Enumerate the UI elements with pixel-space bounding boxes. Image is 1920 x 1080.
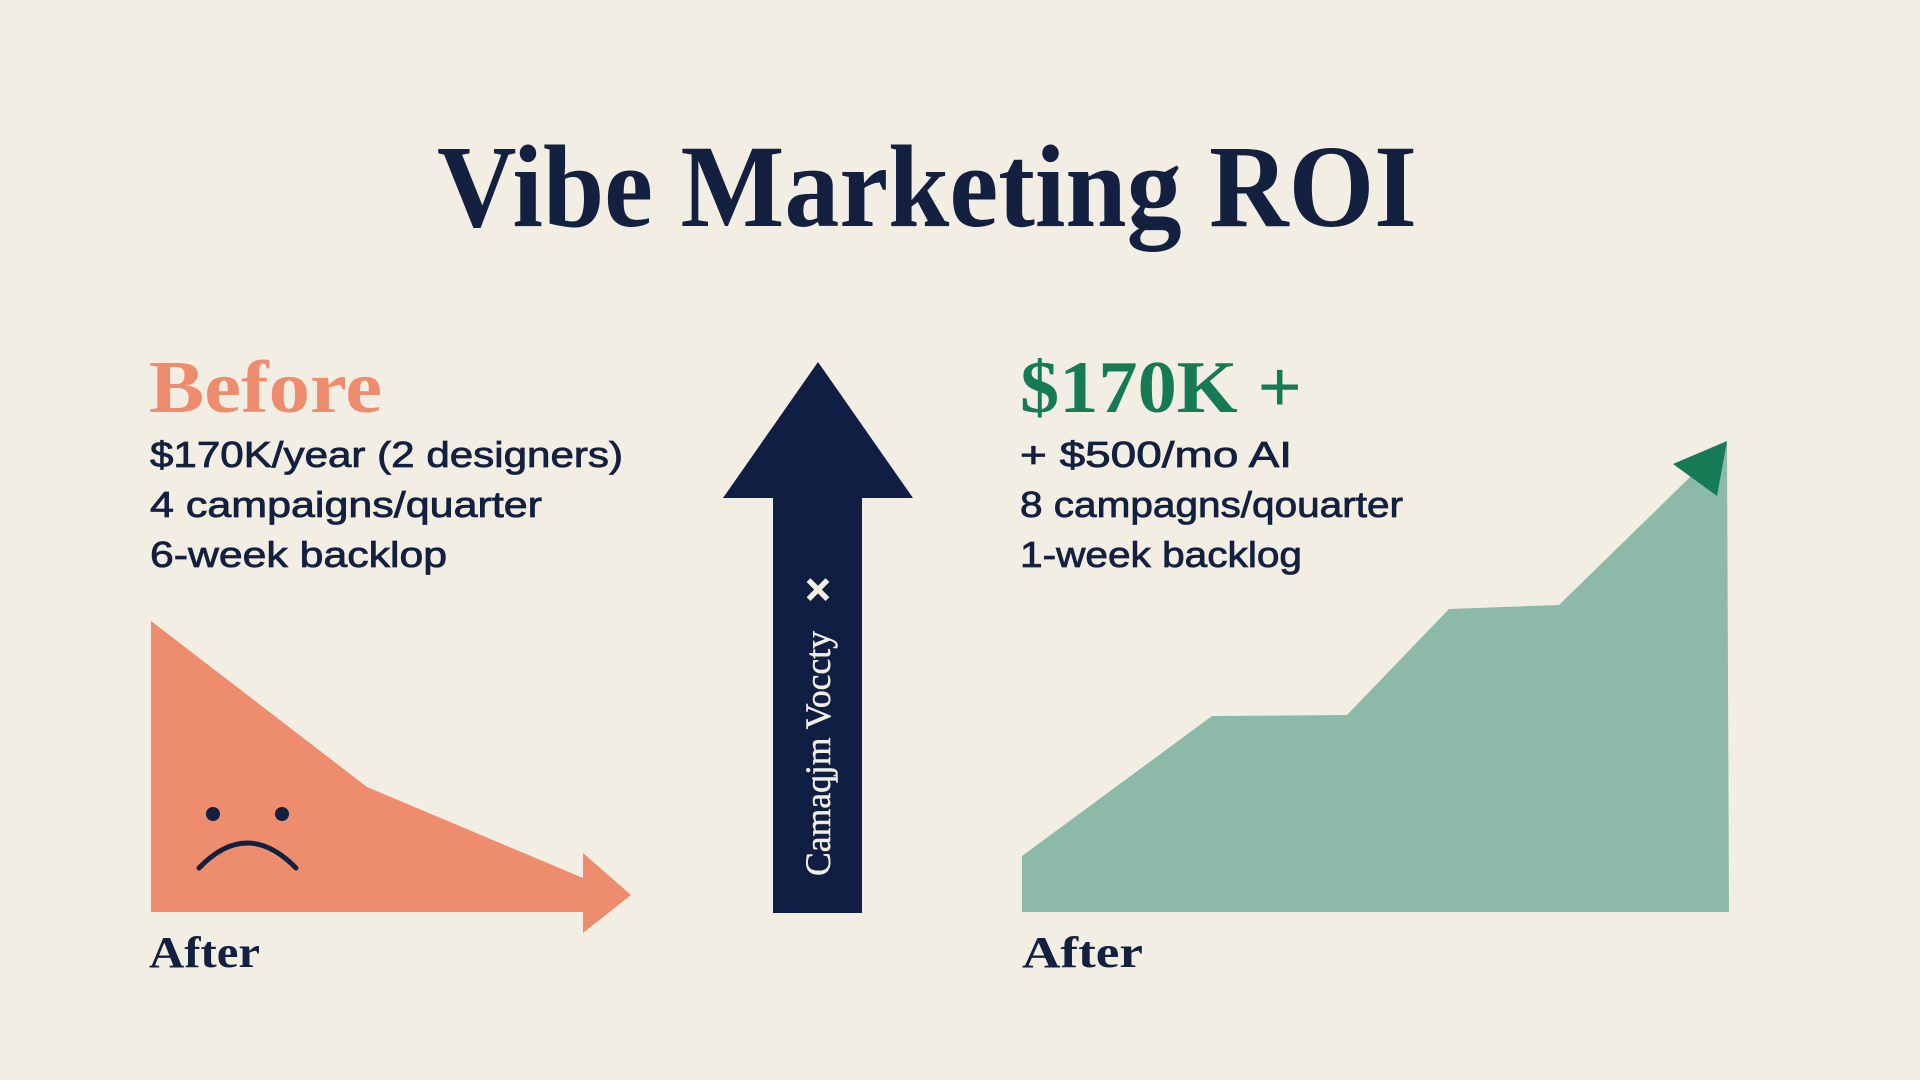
text block: after stats: 1-week backlog — [1020, 534, 1302, 575]
text block: after stats: 8 campagns/qouarter — [1020, 484, 1403, 525]
label: after right: After — [1022, 928, 1143, 977]
heading: $170K +: $170K + — [1020, 347, 1302, 429]
title: Vibe Marketing ROI — [437, 121, 1417, 252]
text block: after stats — [1020, 434, 1403, 575]
arrow label: Camaqjm Voccty — [798, 631, 838, 876]
text block: before stats: 6-week backlop — [150, 534, 447, 575]
text block: before stats — [150, 434, 623, 575]
panel: before — [149, 347, 631, 977]
icon: x mark: ✕ — [804, 571, 832, 611]
text block: after stats: + $500/mo AI — [1020, 434, 1292, 475]
icon: sad face — [199, 807, 296, 868]
label: after left: After — [149, 928, 260, 977]
text block: before stats: 4 campaigns/quarter — [150, 484, 542, 525]
arrow: up — [723, 362, 913, 913]
heading: before: Before — [149, 347, 382, 429]
panel: after — [1020, 347, 1729, 977]
chart: growth area — [1022, 441, 1729, 912]
text block: before stats: $170K/year (2 designers) — [150, 434, 623, 475]
chart: declining area — [151, 621, 631, 933]
icon: growth arrowhead — [1673, 441, 1727, 496]
